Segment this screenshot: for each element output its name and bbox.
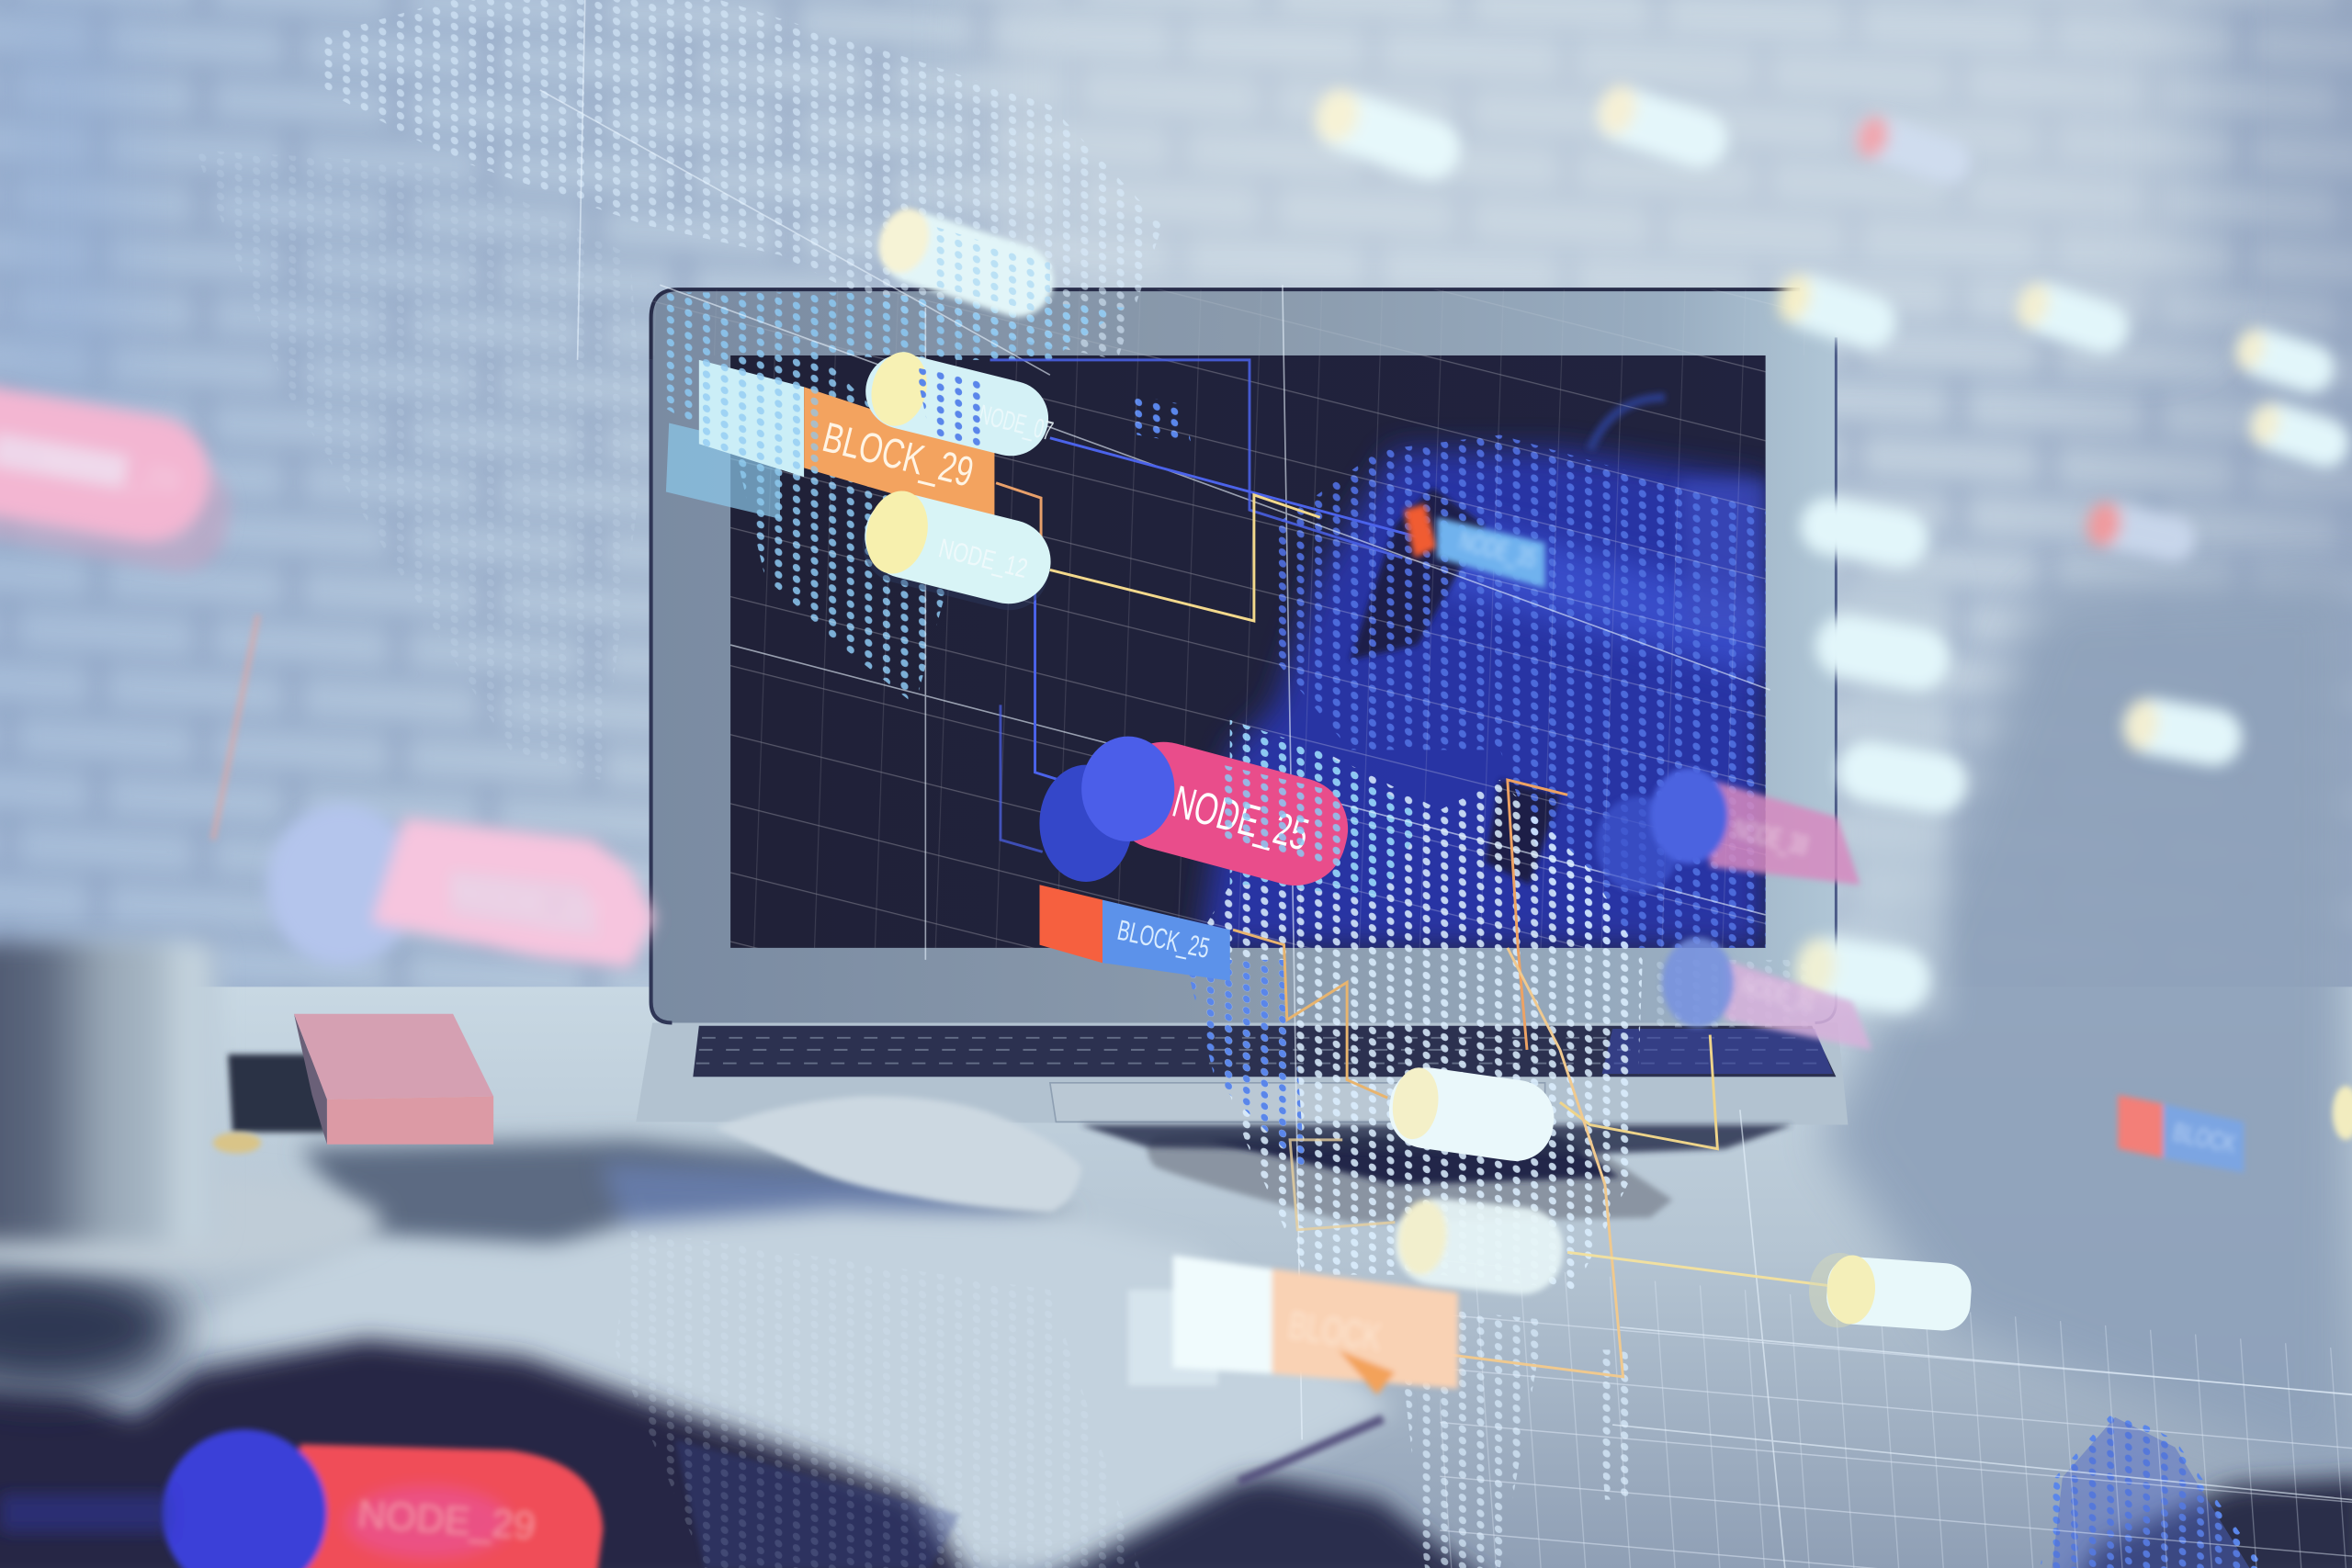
block: lower BLOCK: BLOCK	[1286, 1303, 1384, 1359]
pill: NODE_25	[1039, 730, 1360, 897]
pill: pink center-left blurred: NODE_37	[448, 870, 604, 933]
block: BLOCK_25: BLOCK_25	[1114, 914, 1213, 964]
block: BLOCK_29	[666, 360, 994, 524]
pill: top white pills row	[1306, 80, 2352, 1017]
pill: NODE_25: NODE_25	[1168, 777, 1314, 861]
pill: NODE_07	[858, 344, 1062, 466]
pill: NODE_12	[854, 484, 1060, 618]
computer mouse	[716, 1096, 1081, 1212]
block: BLOCK_25	[1039, 885, 1230, 981]
background: desk surface	[0, 987, 2352, 1568]
pill: red lower-left: NODE_29	[356, 1492, 537, 1548]
pill: pink left blurred: NODE_29	[40, 441, 181, 498]
background: blurred object on the right	[1823, 578, 2352, 1477]
map: lower column	[1395, 1304, 1545, 1568]
laptop lid bezel	[651, 289, 1836, 1022]
dark strip behind phone	[1080, 1125, 1792, 1155]
pill: right pink node lower	[1662, 937, 1872, 1050]
pill: right pink node upper	[1596, 768, 1860, 892]
book cover	[0, 1339, 975, 1568]
map: europe and asia	[1275, 435, 1766, 948]
dark slate shape behind book	[300, 1140, 1080, 1252]
pill: right pink node upper: NODE_38	[1731, 814, 1811, 862]
pill: NODE_12: NODE_12	[936, 533, 1031, 584]
pink eraser box	[213, 1014, 493, 1154]
background: pale column beside laptop	[1842, 570, 1947, 1020]
map: wall landmass left	[195, 150, 645, 780]
trackpad	[1050, 1083, 1545, 1122]
pill: red lower-left	[0, 1429, 603, 1568]
pill: pink left blurred	[0, 374, 238, 579]
hologram: blue glow on screen	[1200, 398, 1766, 948]
coffee cup and saucer	[0, 942, 382, 1391]
map: dots on book	[615, 1230, 1140, 1568]
laptop screen	[730, 355, 1766, 948]
hologram: long bright lines	[540, 0, 2352, 1568]
keyboard	[693, 1026, 1836, 1077]
laptop base	[636, 1023, 1848, 1125]
pill: desk white	[1391, 1194, 1567, 1298]
block: BLOCK_29: BLOCK_29	[819, 413, 978, 496]
smartphone	[1148, 1133, 1672, 1223]
map: bottom right landmass	[2040, 1410, 2265, 1568]
pill: upper laptop cluster	[869, 202, 1063, 326]
map: lower islands	[1593, 1349, 1635, 1500]
pill: keyboard white	[1385, 1063, 1559, 1166]
block: lower BLOCK	[1128, 1256, 1458, 1394]
hologram: grid lines	[651, 289, 2352, 1568]
accent: faint orange diagonal on wall	[213, 615, 258, 840]
map: top left landmass	[315, 0, 1162, 360]
book pages	[0, 1207, 1395, 1568]
pill: far right edge	[2333, 1086, 2352, 1140]
open book and foreground objects	[0, 1140, 2352, 1568]
block: far right: BLOCK	[2171, 1117, 2239, 1158]
pill: lower right	[1806, 1251, 1973, 1337]
block: far right	[2118, 1095, 2244, 1173]
connector lines: yellow and orange	[996, 483, 1838, 1377]
map: north america on laptop	[660, 292, 1125, 705]
label: NODE blue glow block	[1404, 504, 1545, 588]
dark bottom right strip	[2070, 1477, 2352, 1568]
map: africa	[1185, 720, 1643, 1290]
pill: NODE_07: NODE_07	[976, 400, 1056, 446]
pill: right pink node lower: NODE_31	[1738, 971, 1818, 1016]
map: small island	[1128, 393, 1191, 444]
dark corner by book spine	[1032, 1477, 1500, 1568]
pill: pink center-left blurred	[267, 804, 655, 967]
laptop	[636, 289, 1848, 1125]
connector lines: blue	[990, 360, 1418, 852]
label: NODE blue glow block: NODE_35	[1456, 525, 1540, 574]
